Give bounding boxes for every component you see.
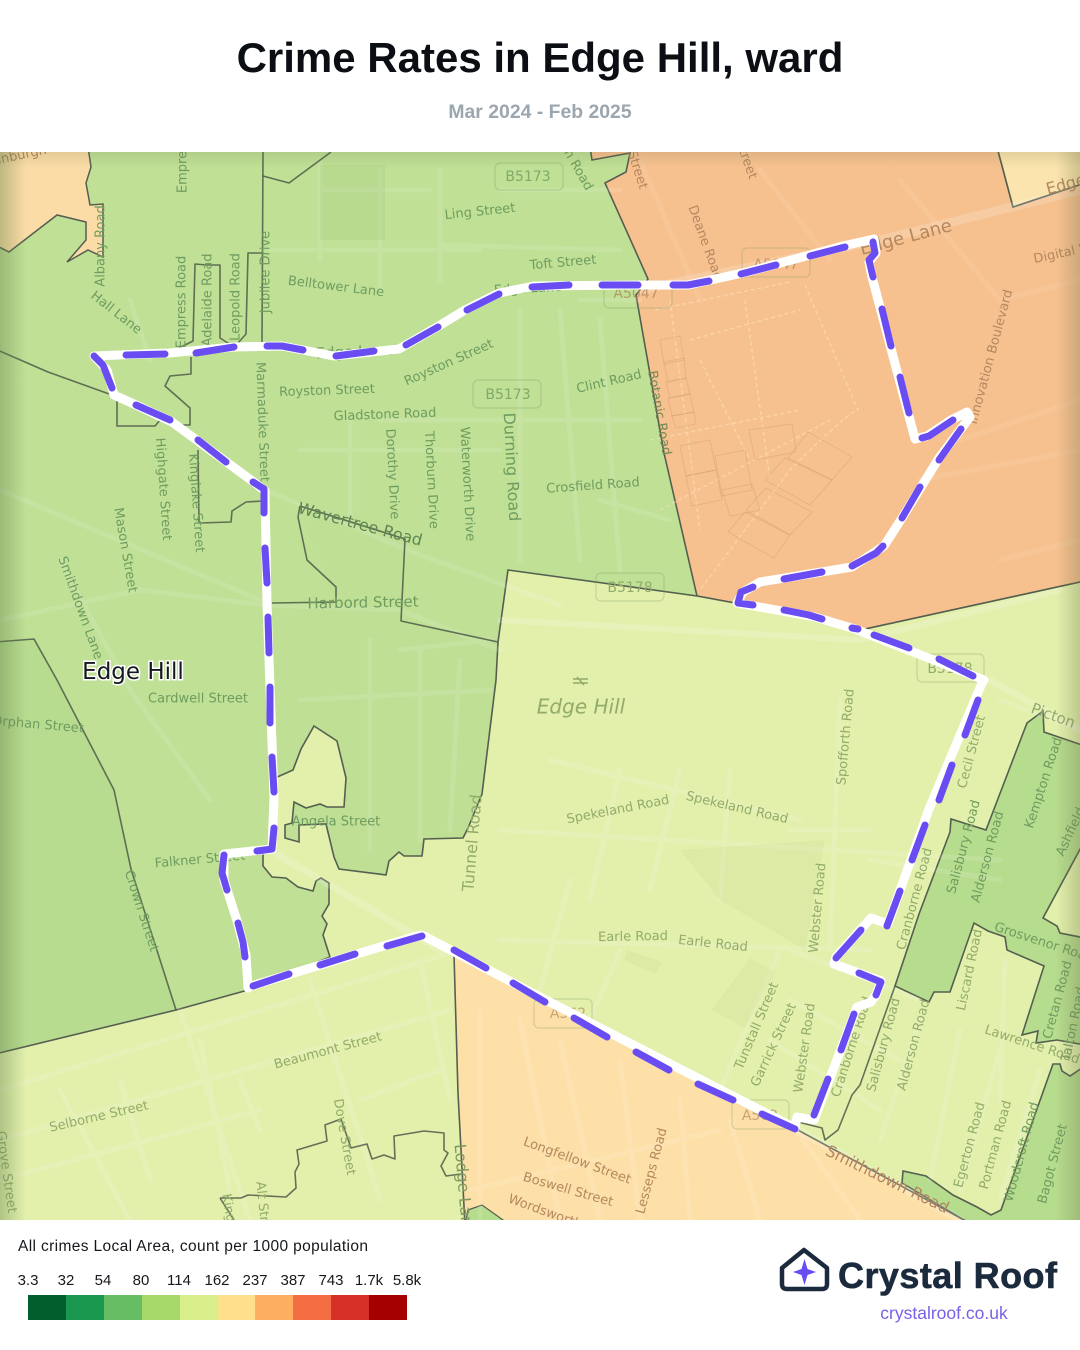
road labels: orange zones: Wordsworth (506, 1192, 584, 1232)
road labels: pale zone: Selborne Street (48, 1098, 150, 1136)
road labels: green zones: Empress Road (174, 256, 190, 348)
road labels: green zones: Cretan Road (1040, 959, 1076, 1041)
icon: Crystal Roof house logo (780, 1248, 830, 1292)
road labels: pale zone: Webster Road (807, 862, 829, 954)
road labels: pale zone: Dove Street (330, 1098, 358, 1176)
road labels: pale zone: Tunstall Street (732, 980, 782, 1073)
LSOA boundary lines (0, 152, 895, 1220)
road labels: green zones: Waterworth Drive (457, 426, 477, 542)
road labels: green zones: Adelaide Road (200, 253, 216, 347)
road labels: pale zone: Alderson Road (895, 998, 933, 1092)
minor streets network (0, 160, 1080, 1220)
legend tick labels (18, 1272, 422, 1289)
legend tick labels: 387 (280, 1272, 306, 1289)
road labels: green zones: Crosfield Road (546, 475, 640, 497)
road labels: pale zone: Lawrence Road (983, 1023, 1080, 1067)
orange-zone streets (640, 160, 1080, 560)
road labels: green zones: Highgate Street (152, 437, 174, 541)
road labels: green zones: Leopold Road (228, 253, 244, 341)
road labels: green zones: Gladstone Road (333, 406, 437, 424)
zone: green sliver at bottom (466, 1204, 504, 1220)
road labels: green zones: B5173 (505, 169, 551, 185)
brand name: Crystal Roof (838, 1255, 1057, 1296)
road labels: orange zones: Deane Road (684, 203, 726, 283)
road labels: pale zone: Salisbury Road (864, 996, 904, 1094)
road labels: pale zone: Cranborne Road (894, 846, 936, 952)
road labels: green zones: n Road (560, 147, 596, 193)
road labels: pale zone: Picton (1029, 699, 1078, 732)
legend colour scale (28, 1295, 407, 1320)
road labels: pale zone: Egerton Road (951, 1101, 989, 1189)
road labels: pale zone: Spekeland Road (684, 789, 790, 827)
map place label: Edge Hill: Edge Hill (82, 659, 184, 685)
road labels: orange zones: Innovation Boulevard (966, 288, 1016, 426)
legend title: All crimes Local Area, count per 1000 population (18, 1238, 368, 1255)
road labels: green zones: Hall Lane (88, 288, 144, 338)
road labels: green zones: Falkner Street (154, 849, 246, 871)
road labels: orange zones: Edge Lane (315, 340, 395, 363)
road labels: green zones: Cardwell Street (148, 692, 248, 706)
road labels: pale zone (0, 580, 1080, 1243)
legend tick labels: 54 (95, 1272, 111, 1289)
road labels: orange zones: A5047 (753, 257, 799, 273)
map area: base green crime-rate zone (0, 152, 696, 1009)
road labels: orange zones: Longfellow Street (521, 1135, 633, 1187)
zone: green central-south (272, 506, 498, 875)
road labels: green zones: Thorburn Drive (421, 430, 441, 529)
legend tick labels: 114 (167, 1272, 191, 1289)
road labels: green zones: Wavertree Road (296, 498, 424, 550)
road labels: orange zones: Edge Lane (857, 215, 954, 260)
road labels: pale zone: Liscard Road (954, 928, 986, 1012)
road labels: orange zones: Edge Lane (494, 280, 562, 298)
road labels: pale zone: King (218, 1193, 238, 1223)
edge vignette (0, 152, 1080, 1220)
road labels: pale zone: Alt Street (252, 1181, 274, 1243)
road labels: green zones: Royston Street (402, 337, 496, 389)
road labels: pale zone: Earle Road (677, 933, 749, 955)
ward boundary: purple dashes (94, 242, 978, 1129)
legend tick labels: 237 (242, 1272, 268, 1289)
road labels: orange zones: Street (732, 139, 760, 181)
road labels: pale zone: Tunnel Road (458, 794, 486, 893)
shaded buildings and parks (320, 165, 825, 1028)
road labels: green zones: B5173 (485, 387, 531, 403)
legend tick labels: 32 (58, 1272, 74, 1289)
road labels: pale zone: Lodge Lane (451, 1143, 477, 1237)
road labels: pale zone: Garrick Street (748, 1001, 800, 1089)
road labels: green zones: Empre (176, 151, 190, 193)
road labels: pale zone: Earle Road (598, 929, 668, 945)
road labels: orange zones: A562 (550, 1006, 586, 1022)
icon: railway station symbol (573, 677, 588, 685)
zone: orange high-crime area (590, 147, 1080, 629)
road labels: green zones (0, 143, 1080, 1205)
road labels: pale zone: Cranborne Road (829, 995, 875, 1099)
road labels: green zones: Marmaduke Street (252, 362, 272, 482)
road labels: green zones: Mason Street (110, 506, 140, 594)
road labels: orange zones: Street (624, 149, 650, 191)
zone: light orange south (454, 955, 975, 1225)
road labels: green zones: Belltower Lane (287, 274, 385, 300)
zone: pale yellow top-right (997, 147, 1080, 207)
road labels: green zones: Alderson Road (969, 810, 1007, 904)
road labels: pale zone: Webster Road (791, 1002, 819, 1094)
road labels: pale zone: Spofforth Road (834, 688, 858, 786)
legend tick labels: 743 (318, 1272, 344, 1289)
road labels: green zones: Woodcroft Road (1001, 1100, 1043, 1204)
zone: tan top-left (0, 147, 103, 262)
road labels: green zones: Botanic Road (644, 370, 674, 456)
road labels: pale zone: Beaumont Street (273, 1029, 383, 1073)
road labels: green zones: Clint Road (575, 367, 643, 397)
road labels: green zones: Ling Street (444, 201, 516, 223)
road labels: orange zones: Boswell Street (521, 1170, 615, 1210)
road labels: orange zones: Smithdown Road (823, 1141, 952, 1217)
road labels: green zones: Bagot Street (1035, 1123, 1071, 1205)
road labels: pale zone: Portman Road (977, 1099, 1015, 1191)
road labels: green zones: Angela Street (292, 814, 380, 830)
road labels: pale zone: Cecil Street (955, 714, 989, 790)
brand url: crystalroof.co.uk (880, 1303, 1008, 1323)
road labels: pale zone: B5178 (607, 580, 653, 596)
road labels: green zones: Dorothy Drive (382, 428, 402, 520)
ward boundary: white casing (94, 239, 984, 1128)
road labels: orange zones (315, 139, 1080, 1232)
road labels: green zones: Harbord Street (307, 593, 419, 612)
road number shields (473, 163, 984, 1129)
zone: green south-east corner (902, 1064, 1080, 1225)
road labels: orange zones: Lesseps Road (633, 1126, 671, 1216)
subtitle: date range: Mar 2024 - Feb 2025 (448, 101, 632, 123)
road labels: green zones: Salisbury Road (944, 798, 984, 896)
road labels: pale zone: Edge Hill (537, 694, 626, 718)
road labels: green zones: Crown Street (121, 868, 161, 954)
road labels: green zones: Jubilee Drive (258, 231, 274, 314)
legend tick labels: 3.3 (18, 1272, 38, 1289)
campus paths in orange zone (650, 282, 858, 590)
road labels: orange zones: A5047 (613, 286, 659, 302)
road labels: green zones: Royston Street (279, 382, 375, 400)
road labels: pale zone: Spekeland Road (565, 793, 671, 827)
road labels: orange zones: A562 (742, 1108, 778, 1124)
road labels: pale zone: B5178 (927, 661, 973, 677)
road labels: green zones: Toft Street (528, 253, 597, 273)
zone: pale yellow-green central and south (0, 570, 1080, 1225)
title: Crime Rates in Edge Hill, ward (237, 34, 843, 81)
road labels: green zones: Kempton Road (1022, 736, 1066, 830)
zone: darker green west (0, 639, 176, 1054)
road labels: green zones: Durning Road (500, 412, 524, 522)
legend tick labels: 80 (133, 1272, 149, 1289)
choropleth map (0, 152, 1080, 1220)
zone: green south-east strip (895, 711, 1080, 1045)
road labels: green zones: Smithdown Lane (54, 554, 106, 662)
legend tick labels: 162 (204, 1272, 230, 1289)
campus building outlines (660, 336, 852, 558)
road labels: green zones: Kinglake Street (185, 453, 207, 553)
road labels: green zones: Albany Road (94, 205, 108, 287)
main roads (270, 190, 1080, 1220)
legend tick labels: 5.8k (393, 1272, 421, 1289)
legend tick labels: 1.7k (355, 1272, 383, 1289)
